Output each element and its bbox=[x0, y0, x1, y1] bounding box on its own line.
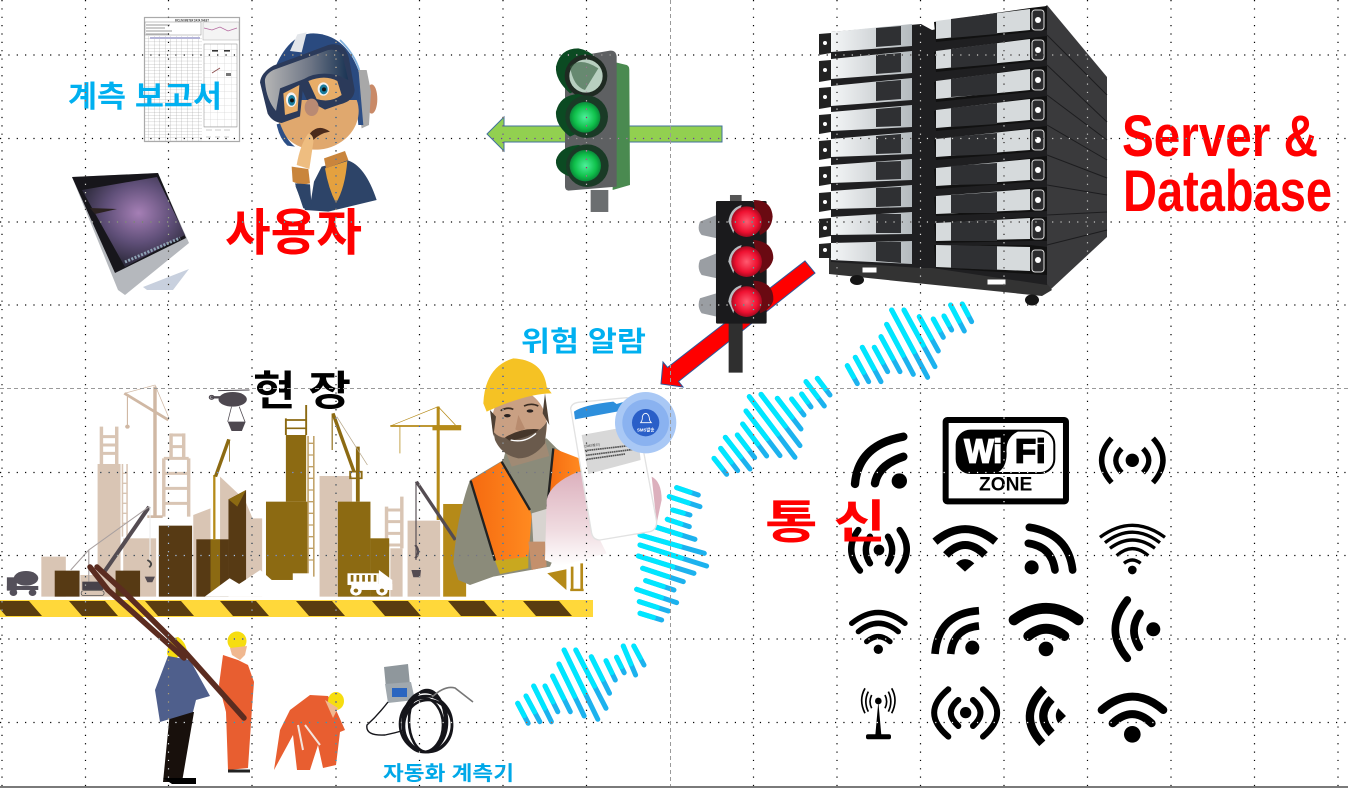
face bbox=[488, 387, 551, 467]
label: 통 신: 통 신 bbox=[765, 496, 886, 548]
worker 3 bbox=[274, 692, 345, 770]
side hoods bbox=[699, 215, 717, 317]
icon: green traffic light bbox=[556, 48, 630, 212]
worker holding phone bbox=[453, 358, 676, 585]
signal wave: network to phone bbox=[714, 378, 830, 474]
bottom lamp bbox=[728, 281, 773, 317]
field workers bbox=[90, 567, 345, 784]
left server column bbox=[819, 24, 912, 264]
label: 현 장: 현 장 bbox=[253, 368, 351, 414]
sensor cable coil bbox=[367, 687, 473, 752]
wifi icon 4 bbox=[851, 530, 907, 571]
icon: server rack bbox=[819, 5, 1107, 306]
SMS message text: [SMS발신] bbox=[584, 441, 600, 448]
label: Server & Database bbox=[1122, 104, 1332, 224]
wifi icon 6 bbox=[1025, 527, 1073, 574]
wifi icon 3 bbox=[1102, 438, 1163, 483]
crawler crane bbox=[71, 507, 155, 596]
wifi zone sign: Fi bbox=[1015, 433, 1046, 470]
rack base bbox=[829, 258, 1052, 306]
label: 계측 보고서: 계측 보고서 bbox=[68, 81, 222, 114]
middle lamp bbox=[556, 94, 608, 138]
wifi zone sign: Wi bbox=[964, 433, 1002, 470]
brown towers bbox=[266, 435, 389, 597]
gold tower crane bbox=[390, 407, 461, 520]
housing bbox=[565, 51, 630, 191]
carried poles bbox=[90, 567, 244, 718]
rack side panel bbox=[1030, 5, 1107, 290]
white debris mounds bbox=[205, 570, 288, 597]
report sheet bbox=[144, 18, 240, 142]
wifi icon 5 bbox=[935, 529, 996, 572]
middle lamp bbox=[728, 240, 773, 277]
label: 사용자: 사용자 bbox=[225, 205, 362, 261]
wifi icon 9 bbox=[935, 611, 979, 655]
icon: desktop monitor bbox=[72, 173, 189, 295]
phone with SMS alert bbox=[571, 392, 676, 540]
wifi icon 11 bbox=[1115, 600, 1160, 658]
wifi zone sign bbox=[946, 420, 1066, 501]
icon: red traffic light bbox=[699, 195, 773, 373]
wifi icon 8 bbox=[852, 612, 905, 654]
character head bbox=[270, 68, 367, 159]
construction site scene bbox=[7, 385, 586, 597]
right server column bbox=[934, 6, 1047, 275]
character body bbox=[295, 160, 377, 212]
beige background buildings bbox=[41, 464, 440, 597]
wifi icon 13 bbox=[934, 689, 997, 737]
gold building bbox=[443, 504, 466, 597]
signal wave: sensor to network bbox=[518, 646, 644, 723]
small crane bbox=[214, 439, 230, 540]
hazard stripe band bbox=[0, 600, 593, 617]
character goggles bbox=[260, 44, 355, 123]
character ear and headphone bbox=[354, 70, 377, 128]
dark brown buildings bbox=[55, 490, 246, 597]
character helmet bbox=[270, 32, 359, 100]
right foreground gold block bbox=[494, 563, 586, 597]
wifi icon 14 bbox=[1030, 689, 1066, 743]
character hand bbox=[292, 133, 313, 208]
brown crane bbox=[332, 413, 367, 502]
worker 2 bbox=[219, 632, 254, 771]
notification bell badge bbox=[615, 392, 676, 453]
signal wave: phone to field bbox=[637, 488, 707, 620]
beige ladders bbox=[101, 427, 402, 548]
label: 자동화 계측기: 자동화 계측기 bbox=[383, 762, 514, 785]
pink hand bbox=[545, 472, 607, 566]
wifi icon 15 bbox=[1102, 697, 1163, 743]
safety vest bbox=[471, 448, 581, 574]
helicopter bbox=[209, 390, 250, 431]
gold overlap bbox=[210, 539, 220, 597]
icon group: wifi signals bbox=[851, 420, 1165, 743]
arrow: red alert flow bbox=[661, 261, 815, 387]
hard hat bbox=[483, 358, 552, 412]
dark crane boom bbox=[411, 482, 455, 577]
housing bbox=[716, 201, 767, 324]
arrow: green data flow bbox=[487, 117, 722, 151]
icon: user character bbox=[260, 32, 377, 212]
wifi icon 10 bbox=[1014, 608, 1078, 656]
pole bbox=[729, 195, 743, 373]
cement mixer truck bbox=[7, 571, 38, 596]
wifi zone sign: ZONE bbox=[979, 475, 1032, 496]
pole bbox=[591, 190, 608, 212]
automated sensor device bbox=[367, 664, 473, 752]
beige crane bbox=[124, 385, 168, 517]
top lamp bbox=[728, 200, 773, 237]
shirt bbox=[453, 438, 583, 585]
character nose and mouth bbox=[305, 99, 330, 140]
notification bell badge: SMS발송 bbox=[637, 426, 654, 432]
rack backing bbox=[831, 6, 1047, 285]
wifi icon 7 bbox=[1100, 525, 1165, 574]
data logger box bbox=[384, 664, 415, 703]
wifi icon 1 bbox=[855, 437, 907, 489]
report sheet: INCLINOMETER DATA SHEET bbox=[175, 18, 209, 22]
brown tower ladder bbox=[286, 405, 314, 577]
bottom lamp bbox=[556, 144, 609, 187]
dump truck bbox=[347, 570, 392, 596]
clipboard and hand bbox=[528, 508, 548, 570]
wifi icon 12: antenna bbox=[862, 688, 895, 739]
label: 위험 알람: 위험 알람 bbox=[521, 326, 646, 357]
top lamp bbox=[556, 48, 607, 97]
signal wave: server to network bbox=[847, 304, 972, 384]
worker 1 bbox=[155, 637, 210, 784]
bulldozer bbox=[283, 573, 316, 597]
